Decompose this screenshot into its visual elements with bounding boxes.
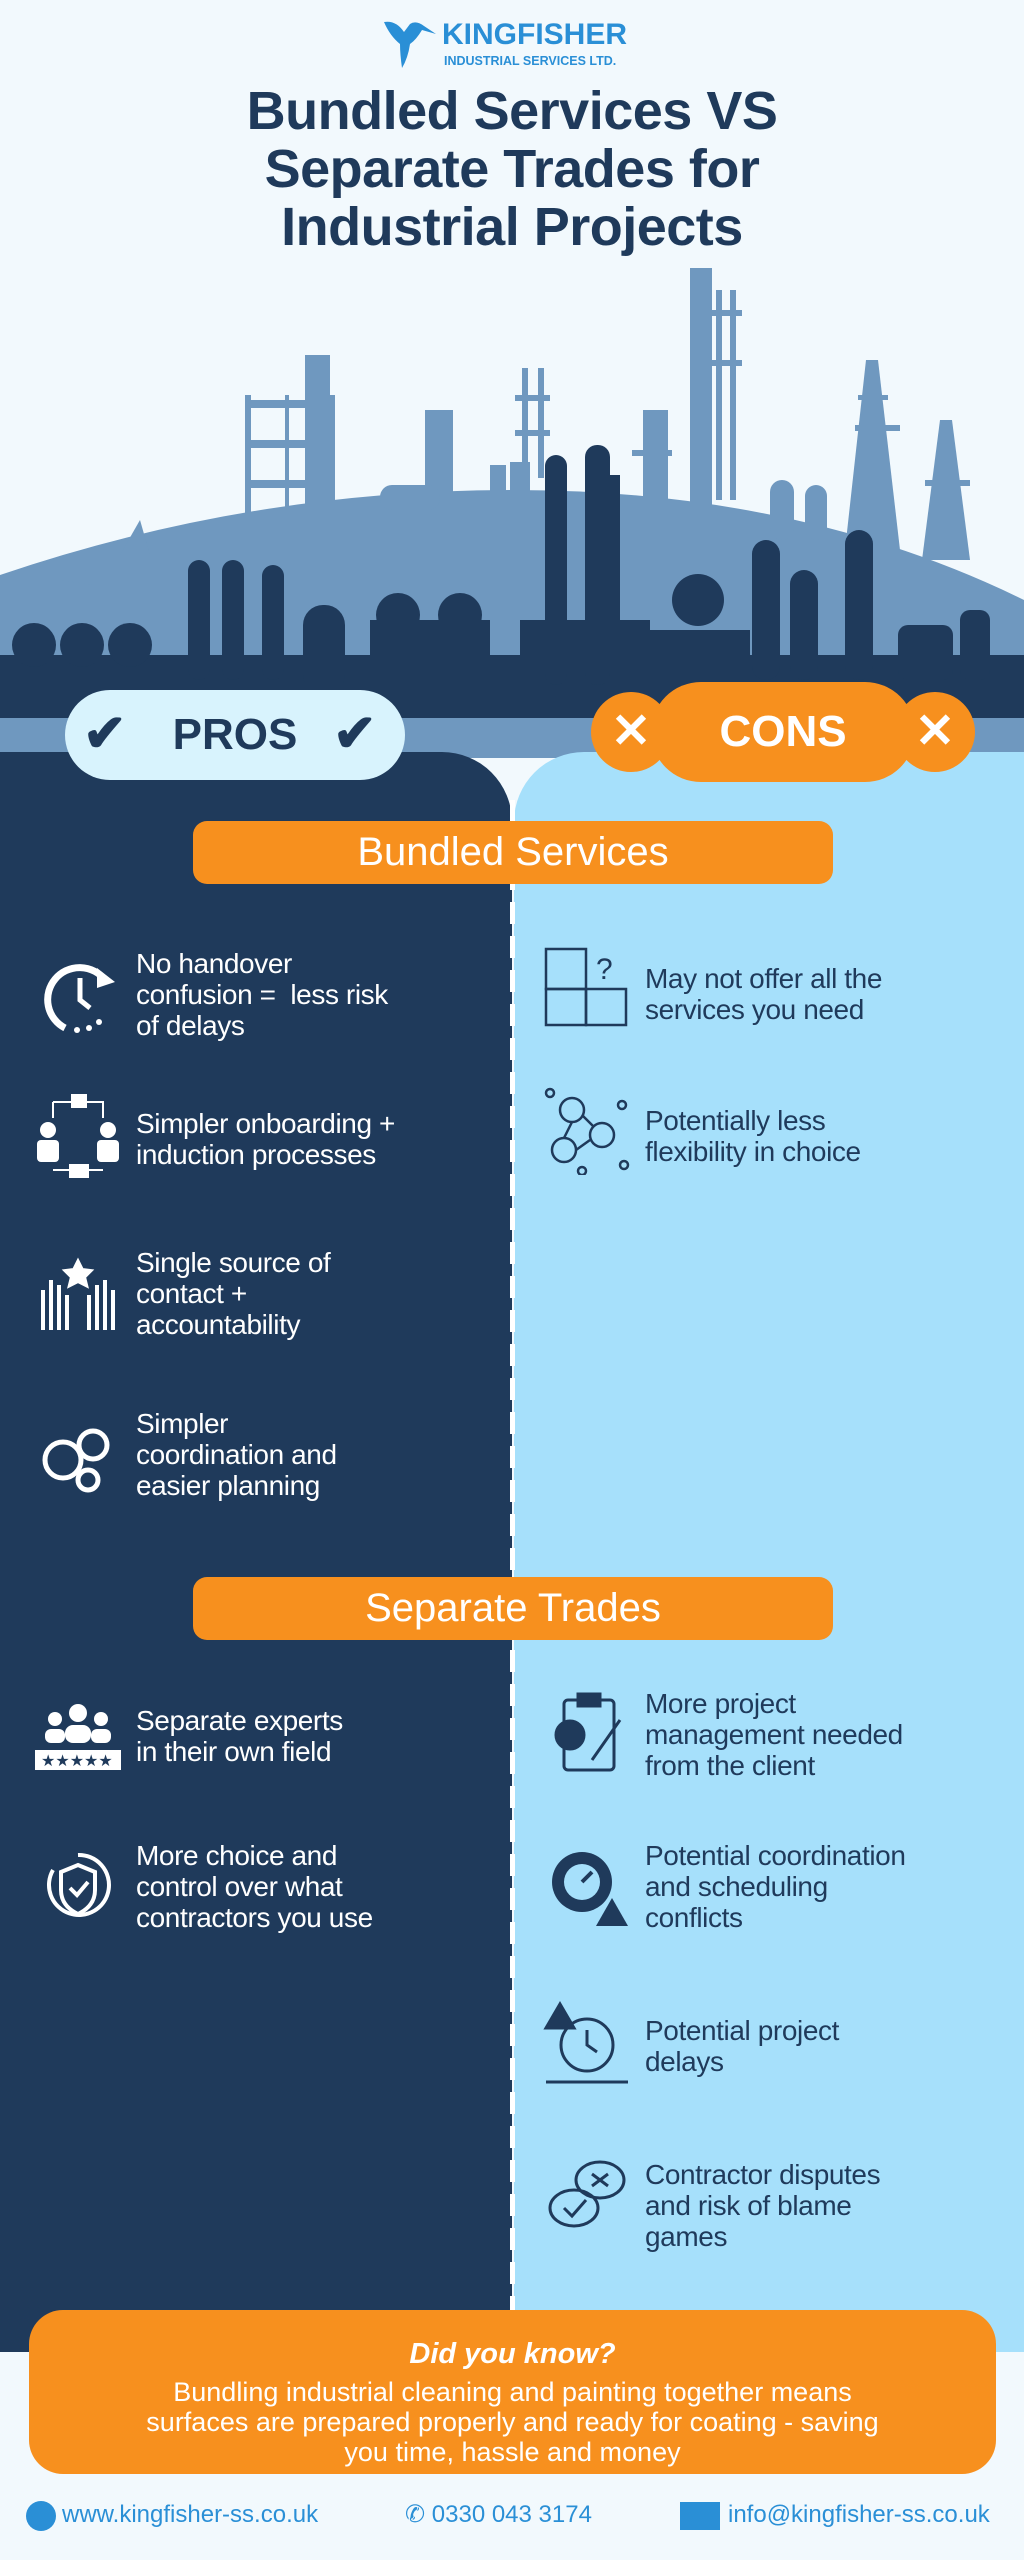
con text 3: from the client: [645, 1750, 815, 1781]
con text 1: May not offer all the: [645, 963, 882, 994]
title: Industrial Projects: [281, 197, 743, 257]
con text 3: [645, 1688, 903, 1781]
title: [247, 81, 777, 257]
con text 5: [645, 2015, 840, 2077]
footer: email: info@kingfisher-ss.co.uk: [728, 2501, 990, 2528]
icon: puzzle question: ?: [596, 953, 613, 986]
icon: dispute bubbles: [548, 2160, 626, 2228]
pro text 1: [136, 948, 388, 1041]
logo: [384, 18, 627, 68]
pro text 6: control over what: [136, 1871, 342, 1902]
heading: Separate Trades: [193, 1577, 833, 1640]
CONS pill: ✕: [915, 705, 955, 758]
PROS pill: ✔: [333, 705, 377, 763]
con text 5: delays: [645, 2046, 724, 2077]
PROS pill: [65, 690, 405, 780]
con text 3: management needed: [645, 1719, 903, 1750]
pro text 6: More choice and: [136, 1840, 337, 1871]
icon: gear warning: [552, 1852, 628, 1926]
con text 1: [645, 963, 882, 1025]
PROS pill: PROS: [173, 710, 297, 759]
con text 2: flexibility in choice: [645, 1136, 861, 1167]
icon: experts: ★★★★★: [41, 1751, 113, 1770]
pro text 3: Single source of: [136, 1247, 330, 1278]
pro text 3: accountability: [136, 1309, 300, 1340]
icon: clock: [44, 964, 115, 1033]
heading: Bundled Services: Bundled Services: [357, 830, 669, 874]
con text 6: [645, 2159, 880, 2252]
con text 1: services you need: [645, 994, 864, 1025]
title: Separate Trades for: [265, 139, 759, 199]
pro text 1: No handover: [136, 948, 292, 979]
skyline illustration: [0, 268, 1024, 758]
con text 2: Potentially less: [645, 1105, 825, 1136]
callout: did you know: surfaces are prepared properly and ready for coating - saving: [146, 2407, 879, 2437]
pro text 4: easier planning: [136, 1470, 320, 1501]
icon: puzzle gears: [42, 1428, 110, 1492]
logo: KINGFISHER: [442, 18, 627, 51]
icon: experts: [35, 1704, 121, 1770]
footer: phone: ✆ 0330 043 3174: [405, 2501, 592, 2528]
icon: clipboard gear: [554, 1692, 622, 1772]
pro text 2: Simpler onboarding +: [136, 1108, 395, 1139]
callout: did you know: you time, hassle and money: [344, 2437, 681, 2467]
con text 6: Contractor disputes: [645, 2159, 880, 2190]
icon: hands: [41, 1258, 115, 1330]
pro text 2: [136, 1108, 395, 1170]
footer: website: www.kingfisher-ss.co.uk: [62, 2501, 318, 2528]
pro text 5: Separate experts: [136, 1705, 343, 1736]
icon: onboarding: [37, 1094, 119, 1178]
con text 2: [645, 1105, 861, 1167]
CONS pill: [591, 682, 975, 782]
pro text 3: contact +: [136, 1278, 247, 1309]
con text 6: games: [645, 2221, 727, 2252]
con text 4: Potential coordination: [645, 1840, 906, 1871]
icon: network people: [544, 1088, 630, 1175]
pro text 2: induction processes: [136, 1139, 376, 1170]
icon: puzzle question: [544, 948, 628, 1026]
pro text 4: coordination and: [136, 1439, 337, 1470]
heading: Separate Trades: Separate Trades: [365, 1586, 661, 1630]
icon: clock warning: [544, 2001, 628, 2084]
panel: cons background: [514, 752, 1024, 2352]
CONS pill: ✕: [611, 705, 651, 758]
pro text 4: [136, 1408, 337, 1501]
pro text 1: of delays: [136, 1010, 244, 1041]
panel: pros background: [0, 752, 512, 2352]
pro text 1: confusion = less risk: [136, 979, 388, 1010]
CONS pill: CONS: [719, 707, 847, 756]
heading: Bundled Services: [193, 821, 833, 884]
con text 4: and scheduling: [645, 1871, 828, 1902]
con text 4: conflicts: [645, 1902, 743, 1933]
callout: did you know: [29, 2310, 996, 2474]
pro text 3: [136, 1247, 331, 1340]
PROS pill: ✔: [83, 705, 127, 763]
pro text 5: in their own field: [136, 1736, 331, 1767]
pro text 5: [136, 1705, 343, 1767]
con text 5: Potential project: [645, 2015, 839, 2046]
pro text 4: Simpler: [136, 1408, 228, 1439]
con text 3: More project: [645, 1688, 796, 1719]
title: Bundled Services VS: [247, 81, 777, 141]
con text 4: [645, 1840, 906, 1933]
pro text 6: contractors you use: [136, 1902, 373, 1933]
pro text 6: [136, 1840, 373, 1933]
callout: did you know: Did you know?: [409, 2338, 616, 2370]
callout: did you know: Bundling industrial cleaning and painting together means: [173, 2377, 852, 2407]
icon: shield check: [47, 1853, 111, 1917]
logo: INDUSTRIAL SERVICES LTD.: [444, 54, 616, 68]
con text 6: and risk of blame: [645, 2190, 851, 2221]
